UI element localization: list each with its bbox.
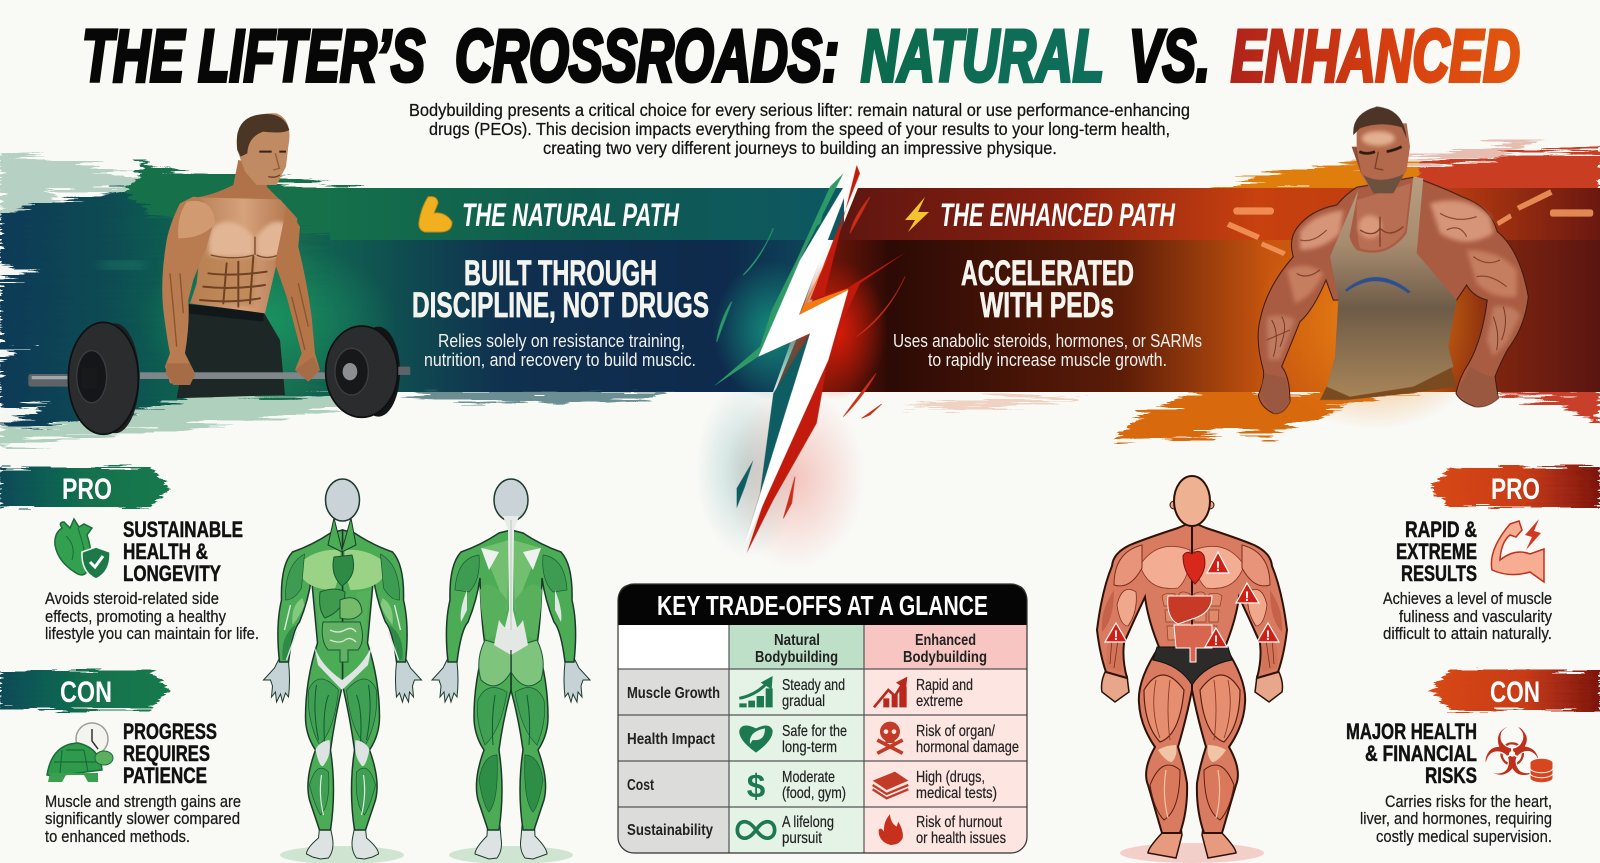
enhanced path headline: ACCELERATED (961, 254, 1134, 293)
con banner: CON (60, 676, 112, 709)
icon: flexed arm (419, 197, 452, 232)
natural cells: pursuit (782, 830, 822, 847)
enhanced cells: Rapid and (916, 677, 973, 694)
heading: REQUIRES (123, 741, 210, 766)
text: Muscle and strength gains are (45, 792, 241, 811)
title: NATURAL (861, 16, 1104, 97)
column headings (755, 632, 987, 666)
enhanced path headline: WITH PEDs (980, 286, 1114, 325)
natural cells: A lifelong (782, 814, 834, 831)
anatomy: natural front (264, 479, 422, 863)
con banner: CON (1490, 676, 1540, 709)
briefs (1153, 647, 1232, 685)
intro text: drugs (PEOs). This decision impacts everything from the speed of your results to your long-term health, (429, 119, 1170, 139)
comparison table (618, 584, 1027, 853)
organs and warnings (1105, 551, 1279, 662)
panel: enhanced path banner (775, 138, 1600, 444)
natural path headline: BUILT THROUGH (464, 254, 657, 293)
enhanced path headline (961, 254, 1134, 325)
icon: biohazard with coins: ☣ (1482, 714, 1542, 791)
heading: LONGEVITY (123, 561, 221, 586)
natural path header (419, 197, 680, 233)
organs and warnings: ! (1245, 588, 1249, 604)
organs and warnings: ! (1266, 627, 1270, 643)
icon: flexed arm with bolt (1491, 519, 1544, 582)
icon: lightning (905, 197, 929, 232)
text: Carries risks for the heart, (1385, 792, 1552, 811)
table header: KEY TRADE-OFFS AT A GLANCE (657, 590, 988, 621)
organs and warnings: ! (1114, 627, 1118, 643)
intro text: creating two very different journeys to building an impressive physique. (543, 138, 1057, 158)
natural cells: Moderate (782, 769, 835, 786)
natural path headline: DISCIPLINE, NOT DRUGS (412, 286, 709, 325)
enhanced path description: Uses anabolic steroids, hormones, or SARMs (893, 330, 1202, 351)
text (1383, 589, 1552, 643)
organs (320, 555, 363, 662)
text: to enhanced methods. (45, 827, 190, 846)
heading: MAJOR HEALTH (1346, 719, 1477, 744)
heading: RAPID & (1405, 517, 1477, 542)
natural path headline (412, 254, 709, 325)
table header (618, 584, 1027, 625)
text: effects, promoting a healthy (45, 607, 226, 626)
enhanced lifter (1258, 107, 1528, 413)
natural path description: nutrition, and recovery to build muscic. (424, 349, 696, 370)
column headings: Bodybuilding (755, 649, 838, 666)
pro banner (1430, 467, 1600, 507)
panel: enhanced pro (1383, 467, 1600, 643)
natural cells: gradual (782, 693, 825, 710)
title: VS. (1129, 16, 1210, 97)
con banner (0, 670, 170, 710)
panel: natural path banner (0, 154, 845, 448)
text: difficult to attain naturally. (1383, 624, 1552, 643)
enhanced cells: Risk of organ/ (916, 723, 995, 740)
enhanced cells (916, 677, 1019, 847)
natural lifter with barbell (28, 113, 410, 434)
anatomy: enhanced front (1097, 476, 1287, 863)
heading: HEALTH & (123, 539, 208, 564)
intro text: Bodybuilding presents a critical choice for every serious lifter: remain natural or use performance-enhancing (409, 100, 1190, 120)
heading: PATIENCE (123, 763, 207, 788)
natural path description: Relies solely on resistance training, (438, 330, 685, 351)
heading: & FINANCIAL (1365, 741, 1477, 766)
enhanced cells: or health issues (916, 830, 1006, 847)
organs and warnings: ! (1216, 558, 1220, 574)
heading (123, 517, 243, 586)
natural cells: Safe for the (782, 723, 847, 740)
table icons: $ (747, 768, 766, 805)
text (1360, 792, 1552, 846)
heading (123, 719, 217, 788)
enhanced cells: medical tests) (916, 785, 997, 802)
text (45, 589, 259, 643)
enhanced cells: hormonal damage (916, 739, 1019, 756)
text: costly medical supervision. (1376, 827, 1552, 846)
natural path header: THE NATURAL PATH (462, 197, 680, 233)
text: fuliness and vascularity (1399, 607, 1552, 626)
heading (1396, 517, 1477, 586)
text: lifestyle you can maintain for life. (45, 624, 259, 643)
row labels: Sustainability (627, 822, 713, 839)
lightning bolt divider (712, 165, 907, 553)
enhanced path description: to rapidly increase muscle growth. (928, 349, 1167, 370)
heading: EXTREME (1396, 539, 1477, 564)
pro banner: PRO (1491, 473, 1540, 506)
enhanced cells: extreme (916, 693, 963, 710)
title (82, 16, 1520, 97)
row labels: Muscle Growth (627, 685, 720, 702)
panel: natural pro (0, 467, 259, 643)
table icons (737, 676, 908, 845)
text: significantly slower compared (45, 809, 240, 828)
column headings: Enhanced (915, 632, 976, 649)
row labels: Health Impact (627, 731, 716, 748)
column headings: Natural (774, 632, 820, 649)
enhanced path header: THE ENHANCED PATH (940, 197, 1176, 233)
text: liver, and hormones, requiring (1360, 809, 1552, 828)
con banner (1430, 670, 1600, 710)
text: Achieves a level of muscle (1383, 589, 1552, 608)
text: Avoids steroid-related side (45, 589, 219, 608)
enhanced path description (893, 330, 1202, 370)
title: THE LIFTER’S (82, 16, 425, 97)
pro banner (0, 467, 170, 507)
heading: RESULTS (1401, 561, 1477, 586)
panel: enhanced con (1346, 670, 1600, 846)
intro text (409, 100, 1190, 158)
heading (1346, 719, 1477, 788)
title: CROSSROADS: (455, 16, 839, 97)
natural path description (424, 330, 696, 370)
enhanced cells: High (drugs, (916, 769, 985, 786)
heading: SUSTAINABLE (123, 517, 243, 542)
icon: heart with shield (55, 519, 110, 579)
panel: natural con (0, 670, 241, 846)
natural cells (782, 677, 847, 847)
heading: PROGRESS (123, 719, 217, 744)
pro banner: PRO (62, 473, 112, 506)
organs and warnings: ! (1214, 632, 1218, 648)
natural cells: long-term (782, 739, 837, 756)
row labels: Cost (627, 777, 655, 794)
bolt glow on paper (696, 382, 865, 568)
text (45, 792, 241, 846)
natural cells: Steady and (782, 677, 845, 694)
column headings: Bodybuilding (903, 649, 987, 666)
enhanced cells: Risk of hurnout (916, 814, 1002, 831)
natural cells: (food, gym) (782, 785, 846, 802)
icon: turtle with clock (47, 723, 113, 782)
enhanced path header (905, 197, 1176, 233)
anatomy: natural back (432, 479, 590, 863)
row labels (627, 685, 720, 839)
heading: RISKS (1425, 763, 1477, 788)
